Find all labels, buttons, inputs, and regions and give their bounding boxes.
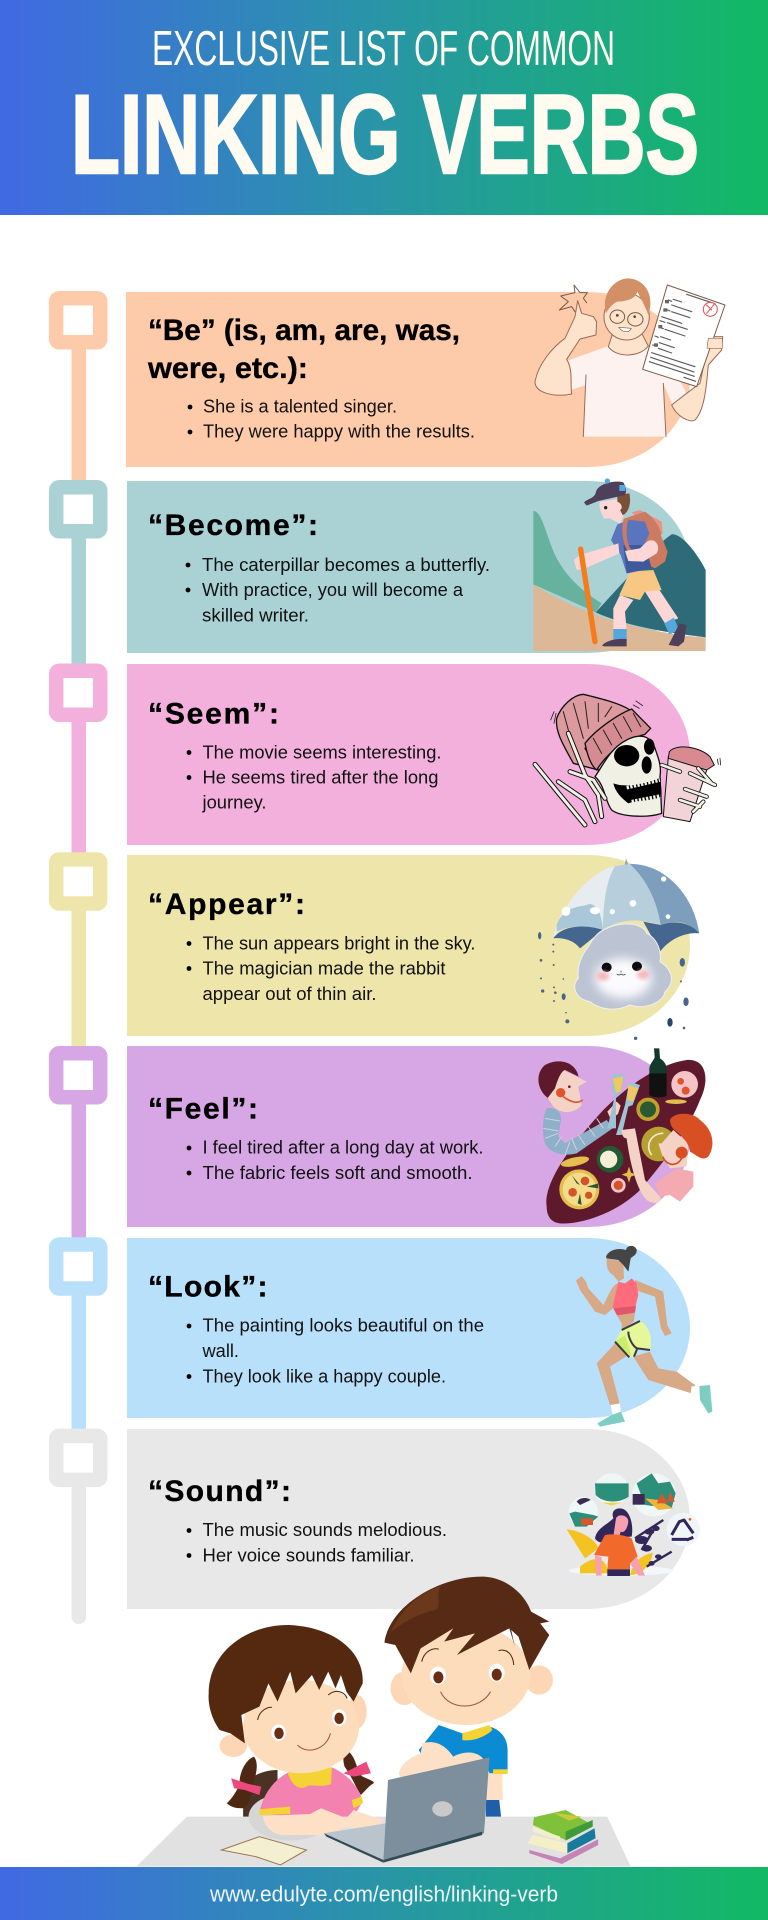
examples: Appear: The magician made the rabbit xyxy=(202,959,446,979)
heading: Seem: “Seem”: xyxy=(148,697,279,730)
examples: Appear: The sun appears bright in the sky. xyxy=(202,933,475,953)
examples: Seem: The movie seems interesting. xyxy=(202,742,442,762)
examples: Sound: The music sounds melodious. xyxy=(202,1520,447,1540)
icon: student with test paper xyxy=(535,278,725,437)
icon: woman and environment bubbles xyxy=(567,1473,700,1576)
examples: Be: She is a talented singer. xyxy=(203,397,397,417)
heading: Become: “Become”: xyxy=(148,509,318,542)
heading: Sound: “Sound”: xyxy=(148,1475,291,1508)
examples: Become: The caterpillar becomes a butterfly. xyxy=(202,555,490,575)
open notebook xyxy=(221,1837,307,1865)
panel: Look xyxy=(127,1238,712,1427)
panel: Be xyxy=(126,278,725,467)
examples: Sound: Her voice sounds familiar. xyxy=(202,1545,414,1565)
heading: Look: “Look”: xyxy=(148,1271,268,1304)
examples: Seem: journey. xyxy=(201,792,266,812)
examples: Be xyxy=(188,397,475,442)
examples: Feel: The fabric feels soft and smooth. xyxy=(202,1163,472,1183)
heading: Feel: “Feel”: xyxy=(148,1092,258,1125)
heading: Be second line: were, etc.): xyxy=(147,352,308,385)
illustration: children at a laptop xyxy=(136,1577,631,1867)
examples: Seem: He seems tired after the long xyxy=(202,768,438,788)
panel: Appear xyxy=(127,855,699,1040)
icon: runner xyxy=(576,1246,712,1427)
icon: hiker with mountains xyxy=(533,478,706,651)
icon: skull with beanie and coffee xyxy=(535,694,721,825)
panel: Sound xyxy=(127,1429,700,1609)
examples: Appear: appear out of thin air. xyxy=(202,984,376,1004)
footer banner xyxy=(0,1867,768,1920)
boy xyxy=(384,1577,553,1817)
girl xyxy=(209,1625,383,1841)
examples: Look xyxy=(187,1316,484,1386)
examples: Feel: I feel tired after a long day at work. xyxy=(202,1138,484,1158)
examples: Look: wall. xyxy=(201,1341,239,1361)
examples: Seem xyxy=(187,742,442,812)
examples: Become xyxy=(186,555,490,625)
header banner xyxy=(0,0,768,215)
panel: Seem xyxy=(127,664,721,845)
footer url: www.edulyte.com/english/linking-verb xyxy=(209,1882,558,1907)
examples: Become: With practice, you will become a xyxy=(202,580,464,600)
laptop xyxy=(324,1757,489,1863)
heading: Appear: “Appear”: xyxy=(148,888,305,921)
timeline xyxy=(56,298,100,1624)
examples: Become: skilled writer. xyxy=(202,605,309,625)
examples: Be: They were happy with the results. xyxy=(203,422,475,442)
books xyxy=(528,1810,598,1864)
examples: Feel xyxy=(187,1138,484,1183)
examples: Look: The painting looks beautiful on the xyxy=(202,1316,484,1336)
examples: Appear xyxy=(187,933,475,1004)
table xyxy=(136,1817,631,1867)
icon: friends sharing food xyxy=(538,1048,712,1223)
examples: Look: They look like a happy couple. xyxy=(202,1366,446,1386)
icon: cloud under umbrella xyxy=(538,858,699,1040)
heading: Be: “Be” (is, am, are, was, xyxy=(148,314,460,347)
panel: Become xyxy=(127,478,706,653)
panel: Feel xyxy=(127,1046,712,1227)
examples: Sound xyxy=(187,1520,447,1565)
